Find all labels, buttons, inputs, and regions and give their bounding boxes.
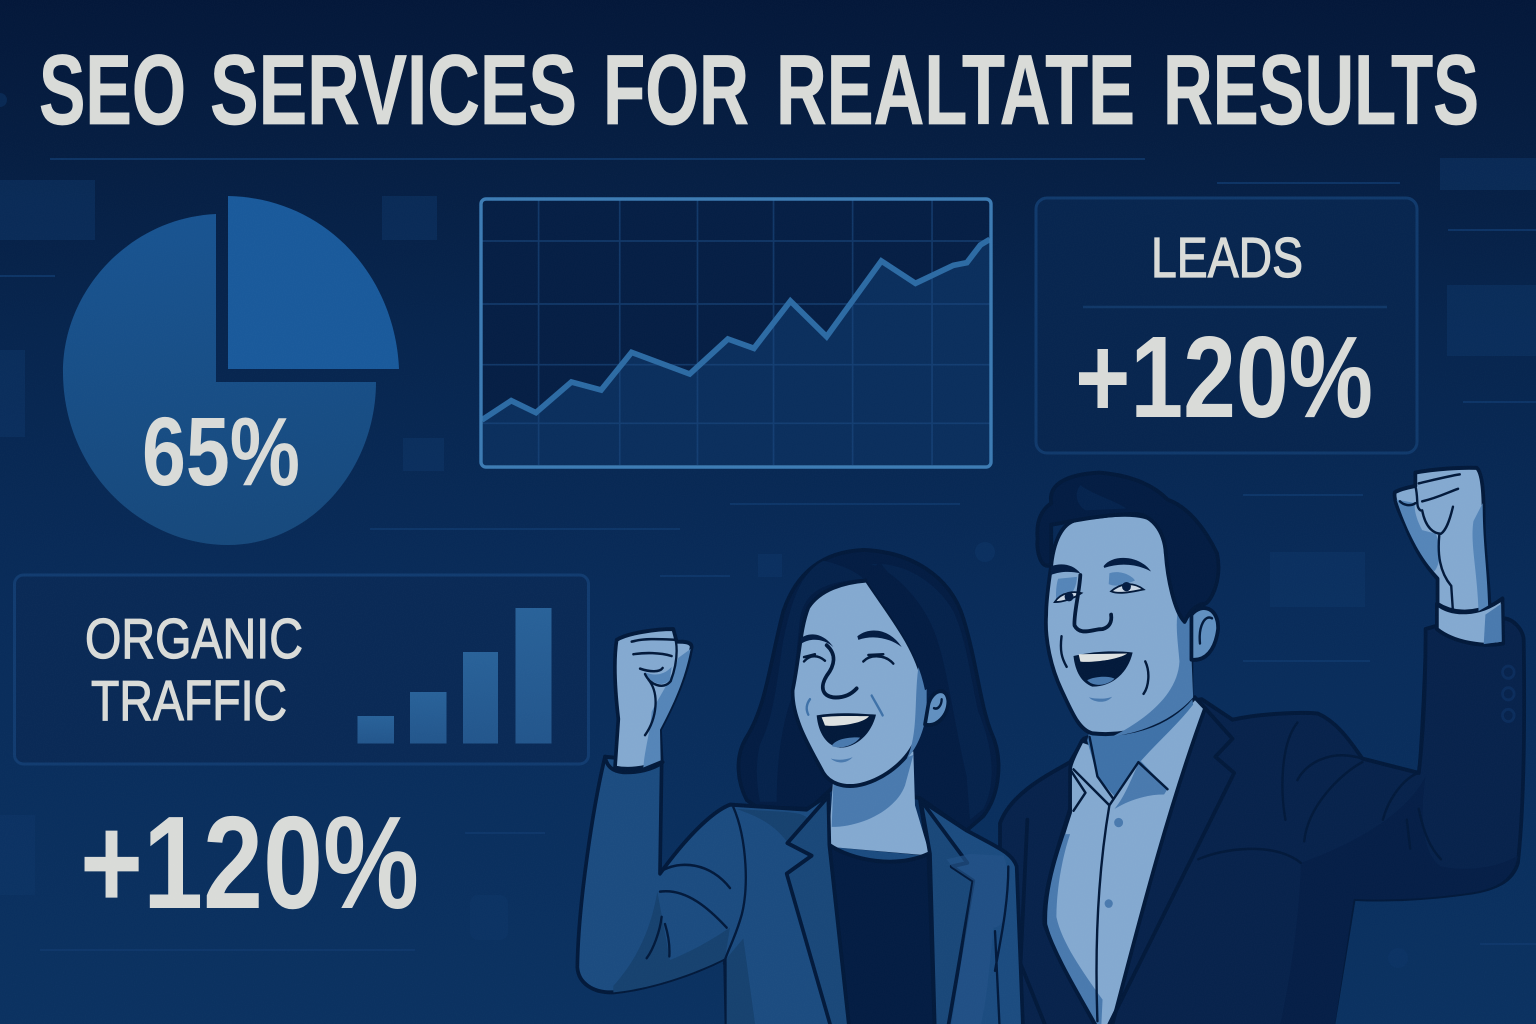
- illustration: man: [1000, 468, 1524, 1024]
- man: eyebrows: [1051, 558, 1151, 575]
- organic traffic label: TRAFFIC: [91, 669, 287, 733]
- woman: nose: [823, 645, 857, 697]
- man: eyes: [1055, 582, 1144, 602]
- woman: right lapel: [921, 800, 973, 1024]
- leads label: LEADS: [1151, 226, 1303, 290]
- woman: hair fringe: [867, 563, 933, 690]
- illustration: woman: [577, 550, 1023, 1024]
- title: SERVICES: [210, 34, 577, 145]
- man: collar and placket: [1070, 737, 1168, 1021]
- man: nose: [1074, 575, 1111, 631]
- man: cuff: [1437, 598, 1503, 645]
- line chart panel: [481, 199, 991, 467]
- man: ear: [1191, 608, 1218, 660]
- man: hair: [1037, 473, 1218, 622]
- woman: cuff edge: [605, 757, 663, 772]
- woman: ear: [925, 691, 948, 725]
- woman: eyebrows: [801, 631, 902, 647]
- woman: jacket: [577, 757, 1023, 1024]
- man: sleeve buttons: [1503, 666, 1514, 722]
- title: SEO: [39, 34, 186, 145]
- man: neck shadow: [1087, 683, 1193, 796]
- pie: detached slice: [228, 196, 399, 369]
- chart area fill: [482, 239, 990, 465]
- leads value: +120%: [1075, 312, 1373, 442]
- man: shirt: [1047, 697, 1205, 1024]
- woman: sleeve folds: [647, 762, 746, 964]
- woman: left lapel: [787, 796, 850, 1024]
- man: raised fist: [1395, 468, 1490, 612]
- organic traffic label: [85, 607, 303, 733]
- title: FOR: [603, 34, 749, 145]
- man: head: [1046, 515, 1191, 734]
- woman: mouth: [817, 713, 876, 748]
- title: REALTATE: [776, 34, 1135, 145]
- woman: inner top: [829, 845, 935, 1024]
- woman: closed eyes: [804, 654, 893, 664]
- pie value: 65%: [142, 397, 300, 506]
- organic traffic value: +120%: [80, 789, 419, 936]
- trend line: [482, 239, 990, 420]
- pie: main segment: [63, 214, 376, 545]
- woman: raised fist: [615, 629, 692, 769]
- bar chart: [358, 608, 552, 744]
- panel: organic traffic: [14, 575, 588, 764]
- woman: sleeve shading: [613, 892, 757, 1024]
- pie chart: [63, 196, 399, 545]
- panel: leads: [1036, 198, 1417, 453]
- man: lapels: [1021, 708, 1234, 1024]
- man: mouth: [1073, 651, 1133, 687]
- woman: head: [793, 581, 923, 786]
- title: [39, 34, 1479, 145]
- woman: neck: [828, 751, 930, 856]
- woman: hair back: [738, 550, 999, 831]
- man: sleeve folds: [1198, 629, 1441, 863]
- man: jacket: [1000, 618, 1524, 1024]
- organic traffic label: ORGANIC: [85, 607, 303, 671]
